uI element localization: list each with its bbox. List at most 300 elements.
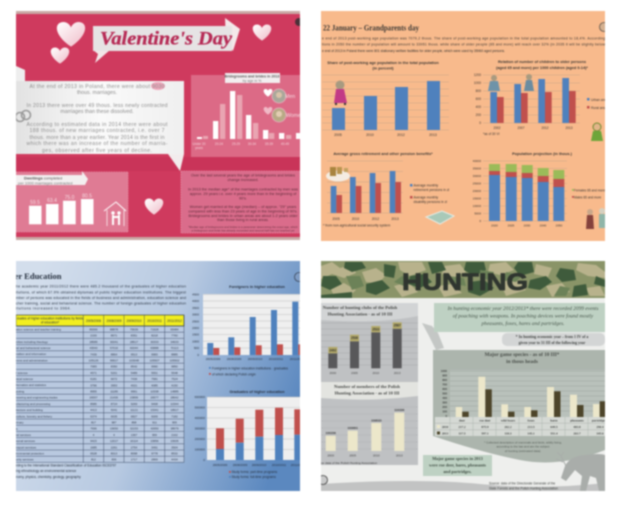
icon: large heart [57, 22, 85, 47]
table: graduates by field: 6374 [90, 414, 97, 418]
text block: age of bridegrooms and brides: Women get married at the age (median) – of approx. "29" years [190, 205, 296, 209]
bar chart: children to older persons: 400 [476, 105, 481, 109]
callout: marriages text: thous. more than a year earlier. Year 2014 is the first in [30, 135, 165, 141]
callout: poaching: of poaching with weapons. In poaching devices were found mostly [453, 312, 594, 320]
bar chart: foreigners in higher education: 500 [194, 346, 199, 350]
text block: intro: itutions increased to 3964. [16, 306, 71, 310]
table: graduates by field: 7083 [90, 365, 97, 369]
data table: game species: 551.4 [550, 432, 558, 436]
bar chart: members [321, 407, 418, 465]
bar chart: hunting clubs [321, 322, 418, 375]
panel: major game species: 300 [442, 400, 447, 404]
bar chart: children to older persons: 2012 [541, 126, 549, 130]
bar chart: population projection: 2040 [540, 224, 547, 228]
bar chart: dwellings completed [16, 171, 128, 232]
table: graduates by field: 8724 [111, 402, 118, 406]
table: graduates by field: 7182 [171, 414, 178, 418]
callout: marriages text: thous. marriages. [77, 90, 117, 96]
panel: major game species: of hunting (estimated data). [505, 449, 541, 453]
table: graduates by field: 1717 [131, 458, 138, 462]
table: graduates by field: 60044 [130, 346, 138, 350]
text block: intro: mber of persons was educated in the fields of business and administration, education science and [16, 296, 186, 300]
stacked bar chart: graduates of higher education: 500000 [195, 406, 205, 410]
table: graduates by field: 8013 [111, 452, 118, 456]
heading: HUNTING [402, 269, 528, 296]
callout: marriages text: 188 thous. of new marriages contracted, i.e. over 7 [30, 128, 165, 134]
table: graduates by field: ness and administration [16, 358, 48, 362]
panel: Valentine's Day [16, 11, 304, 240]
table: graduates by field: of education* [41, 320, 60, 324]
bar chart: dwellings completed: 75.0 [65, 195, 75, 201]
stacked bar chart: graduates of higher education: 2009/2010 [252, 463, 267, 467]
table: graduates by field: ironmental protection [16, 452, 44, 456]
data table: game species: pheasants [570, 418, 584, 422]
table: graduates by field: 5041 [111, 408, 118, 412]
bar chart: foreigners in higher education: Foreigners in higher education institutions - graduates [212, 366, 288, 370]
table: graduates by field: 2009/2010 [126, 319, 142, 323]
table: graduates by field: h [16, 427, 18, 431]
data table: game species: 345.6 [596, 432, 604, 436]
table footnotes: nomy, physics, chemistry, geology, geography [16, 475, 81, 479]
panel: hunting clubs and members [321, 303, 418, 465]
callout: poaching [434, 303, 605, 332]
panel: major game species: Major game species - as of 10 III* [485, 352, 560, 358]
data table: game species: roe deer [479, 418, 491, 422]
icon: rings [16, 110, 30, 122]
bar chart: children to older persons: 2002 [493, 126, 501, 130]
table: graduates by field: 43540 [89, 346, 98, 350]
bar chart: population projection: 10000 [473, 204, 481, 208]
table: graduates by field: urity services [16, 458, 34, 462]
data table: game species: 483.8 [573, 425, 581, 429]
bar chart: population projection: 5000 [474, 212, 481, 216]
callout: marriages text: At the end of 2013 in Poland, there were about 9030 [30, 84, 165, 90]
logo badge [318, 476, 328, 484]
table: graduates by field: 9269 [131, 402, 138, 406]
table: graduates by field: 5548 [171, 371, 178, 375]
panel: Higher Education [0, 261, 305, 491]
stacked bar chart: graduates of higher education: 2010/2011 [272, 463, 286, 467]
table: graduates by field: 987 [112, 420, 117, 424]
bar chart: members: 2000 [327, 454, 334, 458]
text block: age of bridegrooms and brides: change increased. [227, 178, 259, 182]
table: graduates by field: 9423 [90, 439, 97, 443]
text block: intro: e end of 2013 post-working age population was 7079,2 thous. The share of post-working age population in the total population amounted to 18,4%. According [322, 36, 605, 40]
table: graduates by field: 3491 [151, 445, 158, 449]
table: graduates by field: 7436 [131, 377, 138, 381]
bar chart: foreigners in higher education: 1000 [192, 339, 199, 343]
bar chart: hunting clubs: 2000 [329, 371, 336, 375]
bar chart: hunting clubs: 2536 [351, 336, 358, 340]
bar chart: children to older persons: 600 [476, 97, 481, 101]
table: graduates by field: 42950 [150, 427, 159, 431]
table: graduates by field: 2011/2012 [167, 319, 182, 323]
callout: marriages text: which there was an increase of the number of marria- [26, 141, 168, 147]
bar chart: foreigners in higher education: 1500 [192, 333, 199, 337]
table: graduates by field: 959 [152, 433, 157, 437]
table: graduates by field: 1367 [131, 433, 138, 437]
bar chart: children to older persons: Urban areas [591, 98, 609, 102]
table: graduates by field: 30041 [110, 340, 118, 344]
stacked bar chart: graduates of higher education [195, 390, 305, 479]
bar chart: children to older persons: 0 [479, 121, 481, 125]
panel: major game species: 600 [442, 387, 447, 391]
table: graduates by field: 8671 [111, 334, 118, 338]
bar chart: bridegrooms and brides: years [195, 146, 203, 150]
bar chart: bridegrooms and brides [191, 73, 304, 157]
panel: Hunting [310, 261, 607, 491]
data table: game species: 217.2 [458, 425, 466, 429]
bar chart: bridegrooms and brides: 35-39 [265, 142, 273, 146]
bar chart: population projection: 2020 [491, 224, 498, 228]
title ribbon [93, 18, 240, 63]
bar chart: retirement benefits: 2012 [372, 217, 379, 221]
table: graduates by field: 75639 [130, 328, 138, 332]
data table: game species: 262.2 [504, 425, 512, 429]
bar chart: population projection: 2030 [524, 224, 531, 228]
bar chart: dwellings completed: per 1000 marriages contracted [18, 180, 72, 186]
stacked bar chart: graduates of higher education: 2011/2012 [291, 463, 305, 467]
data table: game species: 263.7 [573, 432, 581, 436]
stacked bar chart: graduates of higher education: Graduates of higher education [229, 390, 285, 394]
bar chart: bridegrooms and brides: 30-34 [248, 142, 256, 146]
table: graduates by field: 2261 [111, 445, 118, 449]
text block: age of bridegrooms and brides: In 2013 the median age* of the marriages contracted by men was [188, 188, 298, 192]
panel: major game species: in thous heads [506, 359, 538, 365]
bar chart: bridegrooms and brides: Bridegrooms and brides in 2013 [225, 74, 279, 78]
table: graduates by field: 4434 [171, 458, 178, 462]
table: graduates by field: 34633 [170, 340, 179, 344]
data table: game species: 117.5 [458, 432, 466, 436]
data table: game species: hares [550, 418, 558, 422]
table: graduates by field: 12017 [110, 439, 118, 443]
table: graduates by field: 8955 [90, 390, 97, 394]
icon: small heart [51, 47, 69, 64]
title ribbon: Valentine's Day [100, 30, 233, 50]
bar chart: dwellings completed: 59.5 [30, 200, 40, 206]
bar chart: population projection: 2050 [556, 224, 563, 228]
note: hunting year [502, 333, 605, 346]
table: graduates by field: 105502 [170, 358, 180, 362]
table: graduates by field: 9778 [151, 452, 158, 456]
table: graduates by field: 8350 [111, 365, 118, 369]
text block: age of bridegrooms and brides: 90's. [239, 196, 247, 200]
table: graduates by field: 10344 [170, 402, 179, 406]
table: graduates by field: 3953 [111, 383, 118, 387]
stacked bar chart: graduates of higher education: 2008/2009 [233, 463, 248, 467]
table footnotes: rding to the Intenational Standard Classification of Education ISCED'97 [16, 464, 116, 468]
table: graduates by field: 955 [172, 420, 177, 424]
heading: members: Hunting Association - as of 10 III [335, 390, 400, 396]
table: graduates by field: 99917 [110, 358, 118, 362]
table: graduates by field: 8885 [171, 352, 178, 356]
table: graduates by field: 71928 [150, 328, 159, 332]
table: graduates by field: nalism and information [16, 352, 47, 356]
heading: 22 January – Grandparents day [323, 22, 420, 32]
heading: hunting clubs: Number of hunting clubs of the Polish [323, 305, 398, 310]
bar chart: hunting clubs: 2587 [394, 324, 401, 328]
icon: men: Men [285, 94, 295, 100]
table: graduates by field: 4 [93, 433, 95, 437]
bar chart: members: 2010 [373, 454, 380, 458]
text block: age of bridegrooms and brides: than those living in rural areas. [217, 218, 269, 222]
table: graduates by field: 817 [91, 420, 96, 424]
bar chart: children to older persons: (aged 65 and more) per 1000 children (aged 0-14)* [496, 65, 588, 70]
panel: major game species: 0 [445, 414, 447, 418]
logo badge [295, 18, 303, 26]
table: graduates by field: 7581 [151, 377, 158, 381]
stacked bar chart: graduates of higher education: 400000 [195, 416, 205, 420]
table: graduates by field: 4571 [90, 371, 97, 375]
bar chart: foreigners in higher education [192, 285, 304, 376]
stacked bar chart: graduates of higher education: 100000 [195, 448, 205, 452]
bar chart: children to older persons: 2007 [517, 126, 525, 130]
table: graduates by field: 18917 [170, 408, 179, 412]
table: graduates by field: 7760 [171, 334, 178, 338]
table: graduates by field: 11121 [130, 408, 138, 412]
bar chart: bridegrooms and brides: 40-49 [281, 142, 289, 146]
bar chart: bridegrooms and brides: by age in % [243, 79, 262, 83]
table: graduates by field: 70113 [171, 346, 179, 350]
data table: game species: 649.5 [550, 425, 558, 429]
stacked bar chart: graduates of higher education: 200000 [195, 437, 205, 441]
bottom band [321, 481, 605, 491]
icon: child figure [591, 123, 603, 141]
callout: marriages text: marriages than these dissolved. [60, 109, 134, 115]
bar chart: members: 2013 [396, 454, 403, 458]
table: graduates by field: ufacturing and processing [16, 402, 51, 406]
table: graduates by field: ial services [16, 433, 31, 437]
table: graduates by field: 26557 [89, 396, 98, 400]
bar chart: retirement benefits: * from non-agricultural social security system [323, 224, 390, 228]
stacked bar chart: graduates of higher education: Study forms: full-time programs [232, 475, 276, 479]
logo badge [600, 22, 608, 32]
bar chart: members: 116336 [394, 408, 405, 412]
table: graduates by field: 812 [91, 458, 96, 462]
bar chart: retirement benefits: Average gross retirement and other pension benefits* [333, 151, 433, 156]
table: graduates by field: 898 [132, 420, 137, 424]
table: graduates by field: 11186 [110, 390, 118, 394]
bar chart: children to older persons [474, 59, 609, 136]
bar chart: foreigners in higher education: 0 [197, 353, 199, 357]
table: graduates by field: 2869 [151, 458, 158, 462]
table: graduates by field: 911 [152, 420, 157, 424]
data table: game species: 213.5 [527, 425, 535, 429]
bar chart: children to older persons: 200 [476, 113, 481, 117]
table: graduates by field: 65888 [150, 346, 159, 350]
bar chart: retirement benefits: 2005 [332, 217, 340, 221]
table: graduates by field: nsport services [16, 446, 37, 450]
panel: major game species: according to the law and are the subject [496, 444, 550, 448]
table: graduates by field: 28642 [170, 396, 179, 400]
table: graduates by field [16, 315, 184, 462]
bar chart: foreigners in higher education: 2009/2010 [248, 357, 263, 361]
table: graduates by field: 8542 [131, 365, 138, 369]
source note [489, 482, 558, 490]
callout: marriages text: In 2013 there were over 49 thous. less newly contracted [26, 103, 168, 109]
bar chart: retirement benefits: 2010 [352, 217, 359, 221]
bar chart: members: 2005 [349, 454, 356, 458]
table: graduates by field: 8218 [151, 334, 158, 338]
table: graduates by field: neering and engineering trades [16, 396, 58, 400]
bar chart: share of post-working age population: Share of post-working age population in the total population [327, 60, 439, 65]
table: graduates by field: 65484 [170, 328, 179, 332]
bar chart: population projection: Males 65 and more [574, 196, 602, 200]
table: graduates by field: 6181 [90, 377, 97, 381]
icon: house and couple [104, 202, 126, 226]
table: graduates by field: puting [16, 390, 25, 394]
table: graduates by field: 4085 [151, 383, 158, 387]
bar chart: children to older persons: Relation of number of children to older persons [498, 59, 586, 64]
bar chart: share of post-working age population: (in percent) [372, 66, 394, 70]
table: graduates by field: 1685 [90, 445, 97, 449]
table: graduates by field: 19650 [110, 427, 118, 431]
table: graduates by field: culture, forestry and fishery [16, 414, 53, 418]
bar chart: members: 103651 [348, 426, 358, 430]
bar chart: hunting clubs: 2010 [372, 371, 379, 375]
text block: age of bridegrooms and brides [181, 171, 300, 233]
camouflage header [310, 261, 605, 298]
icon: coins [326, 167, 350, 182]
table: graduates by field: 4413 [90, 408, 97, 412]
bar chart: foreigners in higher education: 2011/2012 [290, 357, 304, 361]
table: graduates by field: 9408 [151, 402, 158, 406]
table: graduates by field: 4021 [131, 383, 138, 387]
icon: banknotes [426, 211, 454, 224]
table: graduates by field: 14885 [170, 390, 179, 394]
text block: intro: tions in 2050 the number of population will amount to 33951 thous. while share of older people (65 and more) will reach over 32% (in 2035 it will be slightly below [322, 42, 605, 46]
icon: deer silhouette [556, 452, 605, 491]
bar chart: bridegrooms and brides: 25-29 [232, 142, 240, 146]
data table: game species: partridges [592, 418, 607, 422]
silhouette: bird [422, 323, 444, 350]
table: graduates by field: 6009 [151, 414, 158, 418]
bar chart: children to older persons: 2013 [565, 126, 573, 130]
table: graduates by field: sonal services [16, 439, 36, 443]
bar chart: foreigners in higher education: 4500 [192, 292, 199, 296]
stacked bar chart: graduates of higher education: 300000 [195, 426, 205, 430]
table: graduates by field: hematics and statistics [16, 383, 47, 387]
table: graduates by field: 8585 [90, 402, 97, 406]
bar chart: population projection: 25000 [473, 182, 481, 186]
heading: members: Number of members of the Polish [334, 384, 400, 389]
note: hunting year: * In hunting economic year – from 1 IV of a [516, 335, 588, 339]
table: graduates by field: 38679 [170, 427, 179, 431]
bar chart: members: ce data of the Polish Hunting Association [321, 461, 377, 465]
table: graduates by field: 5551 [151, 371, 158, 375]
table: graduates by field: 23899 [130, 396, 138, 400]
table: graduates by field: 5201 [111, 371, 118, 375]
table: graduates by field: 15856 [150, 439, 159, 443]
bar chart: dwellings completed: 80.5 [82, 194, 92, 200]
table footnotes: ing ethnobiology an environmental science [16, 469, 76, 473]
callout: major species 2013 [423, 455, 492, 476]
callout: marriages text: According to estimated data in 2014 there were about [26, 122, 168, 128]
panel: Grandparents day [321, 11, 609, 241]
bar chart: hunting clubs: 2005 [351, 371, 358, 375]
bar chart: population projection: Population projection (in thous.) [512, 151, 573, 156]
text block: age of bridegrooms and brides: Over the last several years the age of bridegrooms and brides [191, 174, 295, 178]
stacked bar chart: graduates of higher education: 2005/2006 [213, 463, 228, 467]
table: graduates by field: 6672 [111, 377, 118, 381]
table: graduates by field: itecture and building [16, 408, 43, 412]
bar chart: share of post-working age population: 2010 [366, 133, 374, 137]
bar chart: retirement benefits: disability pensions in zl [414, 200, 447, 204]
table: graduates by field: 3504 [171, 445, 178, 449]
table: graduates by field: 2005/2006 [86, 319, 101, 323]
table: graduates by field: 7696 [90, 427, 97, 431]
source note: Source: data of the Directorate Generale of the [489, 482, 555, 486]
bar chart: children to older persons: 1000 [474, 81, 481, 85]
bar chart: foreigners in higher education: Foreigners in higher education [229, 285, 286, 289]
icon: women: Women [286, 113, 304, 119]
data table: game species: wild boars [501, 418, 516, 422]
data table: game species: 290.4 [596, 425, 604, 429]
stacked bar chart: graduates of higher education: 0 [203, 458, 205, 462]
table: graduates by field: 57016 [110, 346, 118, 350]
text block: intro [16, 284, 186, 310]
bar chart: foreigners in higher education: 2010/2011 [269, 357, 283, 361]
icon: bottom heart [145, 198, 163, 215]
callout: poaching: In hunting economic year 2012/2013* there were recorded 2099 events [447, 306, 598, 312]
panel: major game species: 400 [442, 396, 447, 400]
bar chart: dwellings completed: Dwellings completed [24, 176, 62, 180]
bar chart: retirement benefits: Average monthly [414, 184, 439, 188]
table: graduates by field: 15341 [150, 408, 159, 412]
icon: elderly couple [586, 208, 605, 229]
panel: major game species: 800 [442, 378, 447, 382]
table: graduates by field: 4150 [171, 383, 178, 387]
bar chart: foreigners in higher education: 3000 [192, 312, 199, 316]
table: graduates by field: 28517 [130, 340, 138, 344]
bar chart: share of post-working age population: 2013 [429, 133, 437, 137]
table: graduates by field: duates of higher education institutions by fields [17, 316, 83, 320]
bar chart: hunting clubs: 2013 [394, 371, 401, 375]
data table: game species: 597.1 [481, 432, 489, 436]
table: graduates by field: 8532 [171, 452, 178, 456]
table: graduates by field: 30333 [150, 340, 159, 344]
table: graduates by field: 8864 [111, 352, 118, 356]
bar chart: children to older persons: *as of 30 VI [483, 132, 500, 136]
table: graduates by field: 2010/2011 [147, 319, 162, 323]
table: graduates by field: 2162 [171, 433, 178, 437]
table: graduates by field: 9983 [151, 352, 158, 356]
table: graduates by field: 26577 [150, 396, 159, 400]
data table: game species [435, 417, 607, 436]
bar chart: members: 109533 [371, 418, 382, 422]
table: graduates by field: 2008/2009 [106, 319, 122, 323]
data table: game species: 2010 [442, 425, 449, 429]
bar chart: dwellings completed: 63.4 [47, 198, 57, 204]
panel: major game species: 200 [442, 405, 447, 409]
bar chart: share of post-working age population: 2005 [334, 133, 342, 137]
bar chart: bridegrooms and brides: Under 20 [192, 142, 206, 146]
icon: grandmother figure [334, 80, 347, 105]
table: graduates by field: 105126 [89, 358, 99, 362]
panel: major game species: 100 [442, 410, 447, 414]
table: graduates by field: 28585 [89, 340, 98, 344]
bar chart: hunting clubs: 2533 [372, 328, 380, 332]
source note: State Forests and the Polish Hunting Association [489, 486, 558, 490]
table: graduates by field: 32153 [130, 427, 138, 431]
icon: grandfather figures [488, 74, 534, 91]
table: graduates by field: ation science and teacher training [16, 328, 61, 332]
table: graduates by field: 7524 [171, 377, 178, 381]
callout: major species 2013: and partridges. [443, 469, 472, 474]
table: graduates by field: 9990 [151, 365, 158, 369]
panel: major game species: 700 [442, 382, 447, 386]
icon: right heart [253, 24, 271, 41]
